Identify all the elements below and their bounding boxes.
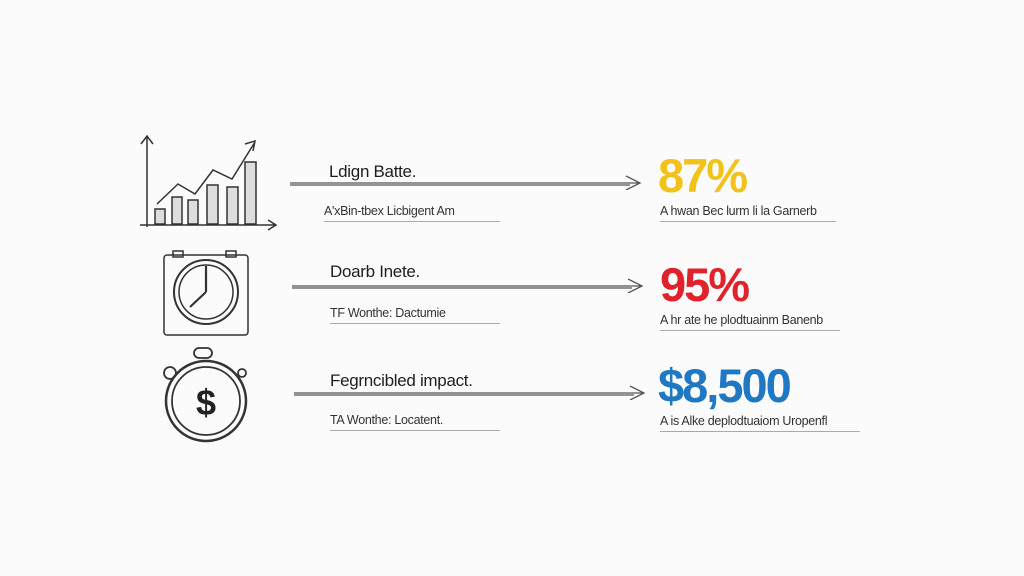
stat $8,500: $8,500 (658, 359, 790, 412)
row 1 (290, 162, 642, 222)
subtext: TA Wonthe: Locatent. (330, 413, 443, 427)
row 2 (292, 262, 644, 324)
arrow (292, 278, 644, 293)
icon: bar chart (140, 134, 278, 231)
stat 87%: A hwan Bec lurm li la Garnerb (660, 204, 817, 218)
row 3 (294, 371, 646, 431)
arrow (290, 175, 642, 190)
stat 95%: A hr ate he plodtuainm Banenb (660, 313, 823, 327)
subtext (330, 413, 500, 431)
stat 95% (660, 258, 840, 331)
heading: Doarb Inete. (330, 262, 420, 281)
stat 87%: 87% (658, 149, 746, 202)
arrow (294, 385, 646, 400)
stat 95%: 95% (660, 258, 748, 311)
stat 87% (658, 149, 836, 222)
subtext (330, 306, 500, 324)
stat $8,500 (658, 359, 860, 432)
icon: clock (163, 250, 249, 336)
heading: Fegrncibled impact. (330, 371, 473, 390)
icon: stopwatch with dollar: $ (196, 382, 216, 423)
subtext (324, 204, 500, 222)
icon: stopwatch with dollar (163, 347, 248, 442)
heading: Ldign Batte. (329, 162, 416, 181)
subtext: A'xBin-tbex Licbigent Am (324, 204, 455, 218)
stat $8,500: A is Alke deplodtuaiom Uropenfl (660, 414, 827, 428)
subtext: TF Wonthe: Dactumie (330, 306, 446, 320)
